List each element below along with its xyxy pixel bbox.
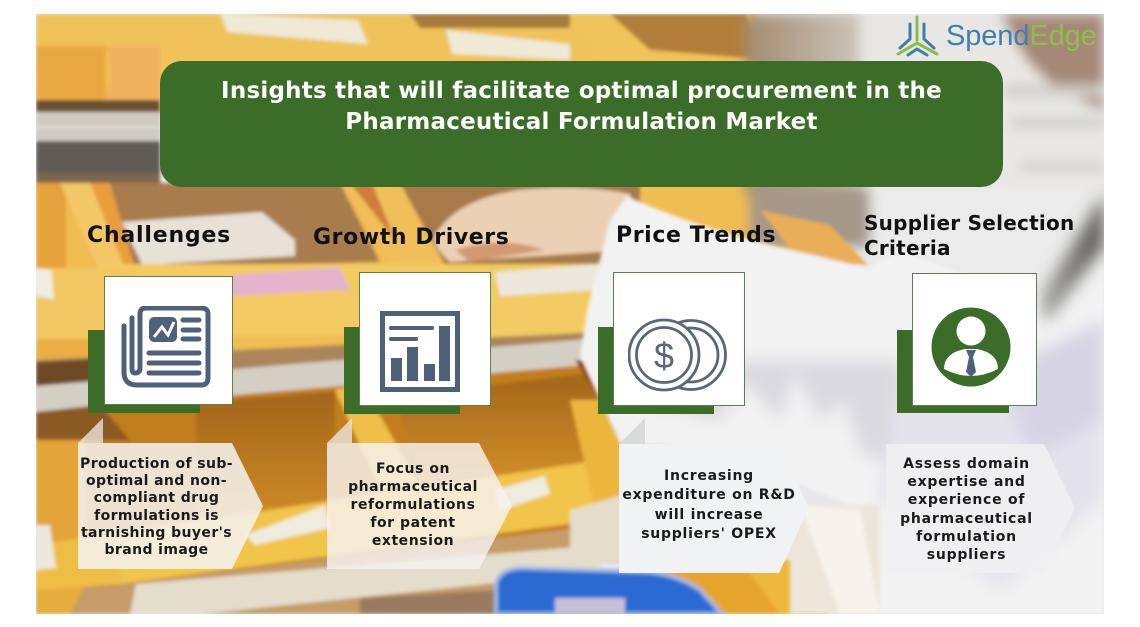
heading: supplier selection criteria xyxy=(864,211,1075,260)
callout text: optimal and non- xyxy=(86,473,227,489)
callout text: pharmaceutical xyxy=(348,479,478,495)
callout: growth drivers xyxy=(327,418,512,569)
callout text: pharmaceutical xyxy=(900,511,1033,527)
middle shelf xyxy=(36,338,600,412)
coat folds xyxy=(640,362,900,470)
top row of bins xyxy=(36,14,756,114)
callout text: brand image xyxy=(104,542,208,558)
blue bin xyxy=(496,568,722,614)
title banner xyxy=(160,61,1003,187)
callout text: compliant drug xyxy=(94,490,219,506)
callout text xyxy=(622,468,796,542)
logo wordmark: SpendEdge xyxy=(946,20,1097,52)
heading: supplier selection criteria: Criteria xyxy=(864,236,951,260)
icon: coins xyxy=(628,318,727,392)
callout text xyxy=(900,456,1033,563)
callout text xyxy=(80,456,233,558)
bottom shelf xyxy=(68,526,570,614)
top right background xyxy=(745,14,870,194)
heading: challenges: Challenges xyxy=(87,223,231,248)
orange bin behind arm xyxy=(760,210,868,265)
dark coat lapel xyxy=(1040,194,1104,325)
callout text: experience of xyxy=(908,492,1025,508)
callout text: formulation xyxy=(916,529,1017,545)
panel: challenges xyxy=(78,223,263,569)
callout text: Focus on xyxy=(376,461,450,477)
icon card: report chart xyxy=(344,272,491,414)
icon card: coins xyxy=(598,272,745,414)
callout text: Increasing xyxy=(664,468,754,484)
callout text: expenditure on R&D xyxy=(622,487,796,503)
callout: supplier selection criteria xyxy=(886,444,1074,573)
second row of bins xyxy=(36,183,796,353)
panel: price trends xyxy=(598,223,808,573)
icon: report chart xyxy=(380,311,460,392)
callout text: extension xyxy=(372,533,454,549)
heading: supplier selection criteria: Supplier Selection xyxy=(864,211,1075,235)
title text: Insights that will facilitate optimal procurement in the xyxy=(221,78,942,104)
callout: challenges xyxy=(78,418,263,569)
icon: person xyxy=(932,308,1010,386)
panel: supplier selection criteria xyxy=(864,211,1075,573)
callout text: tarnishing buyer's xyxy=(81,525,232,541)
heading: growth drivers: Growth Drivers xyxy=(313,225,509,250)
panel: growth drivers xyxy=(313,225,512,569)
callout text: expertise and xyxy=(907,474,1026,490)
callout text: Assess domain xyxy=(903,456,1030,472)
third row of bins xyxy=(84,363,622,584)
callout text xyxy=(348,461,478,549)
heading: price trends: Price Trends xyxy=(616,223,776,248)
icon: coins: $ xyxy=(654,335,674,376)
icon: newspaper xyxy=(122,306,210,388)
callout text: suppliers xyxy=(927,547,1006,563)
logo: SpendEdge xyxy=(896,16,1097,57)
callout text: will increase xyxy=(655,507,763,523)
callout text: suppliers' OPEX xyxy=(641,526,777,542)
icon card: person xyxy=(897,273,1037,413)
white coat xyxy=(580,196,1104,614)
callout text: Production of sub- xyxy=(80,456,233,472)
callout text: for patent xyxy=(370,515,456,531)
icon card: newspaper xyxy=(88,276,233,413)
callout text: formulations is xyxy=(94,508,219,524)
title text: Pharmaceutical Formulation Market xyxy=(345,109,818,135)
callout text: reformulations xyxy=(351,497,475,513)
icon: logo mark xyxy=(896,16,939,57)
callout: price trends xyxy=(619,418,808,573)
title text xyxy=(221,78,942,135)
